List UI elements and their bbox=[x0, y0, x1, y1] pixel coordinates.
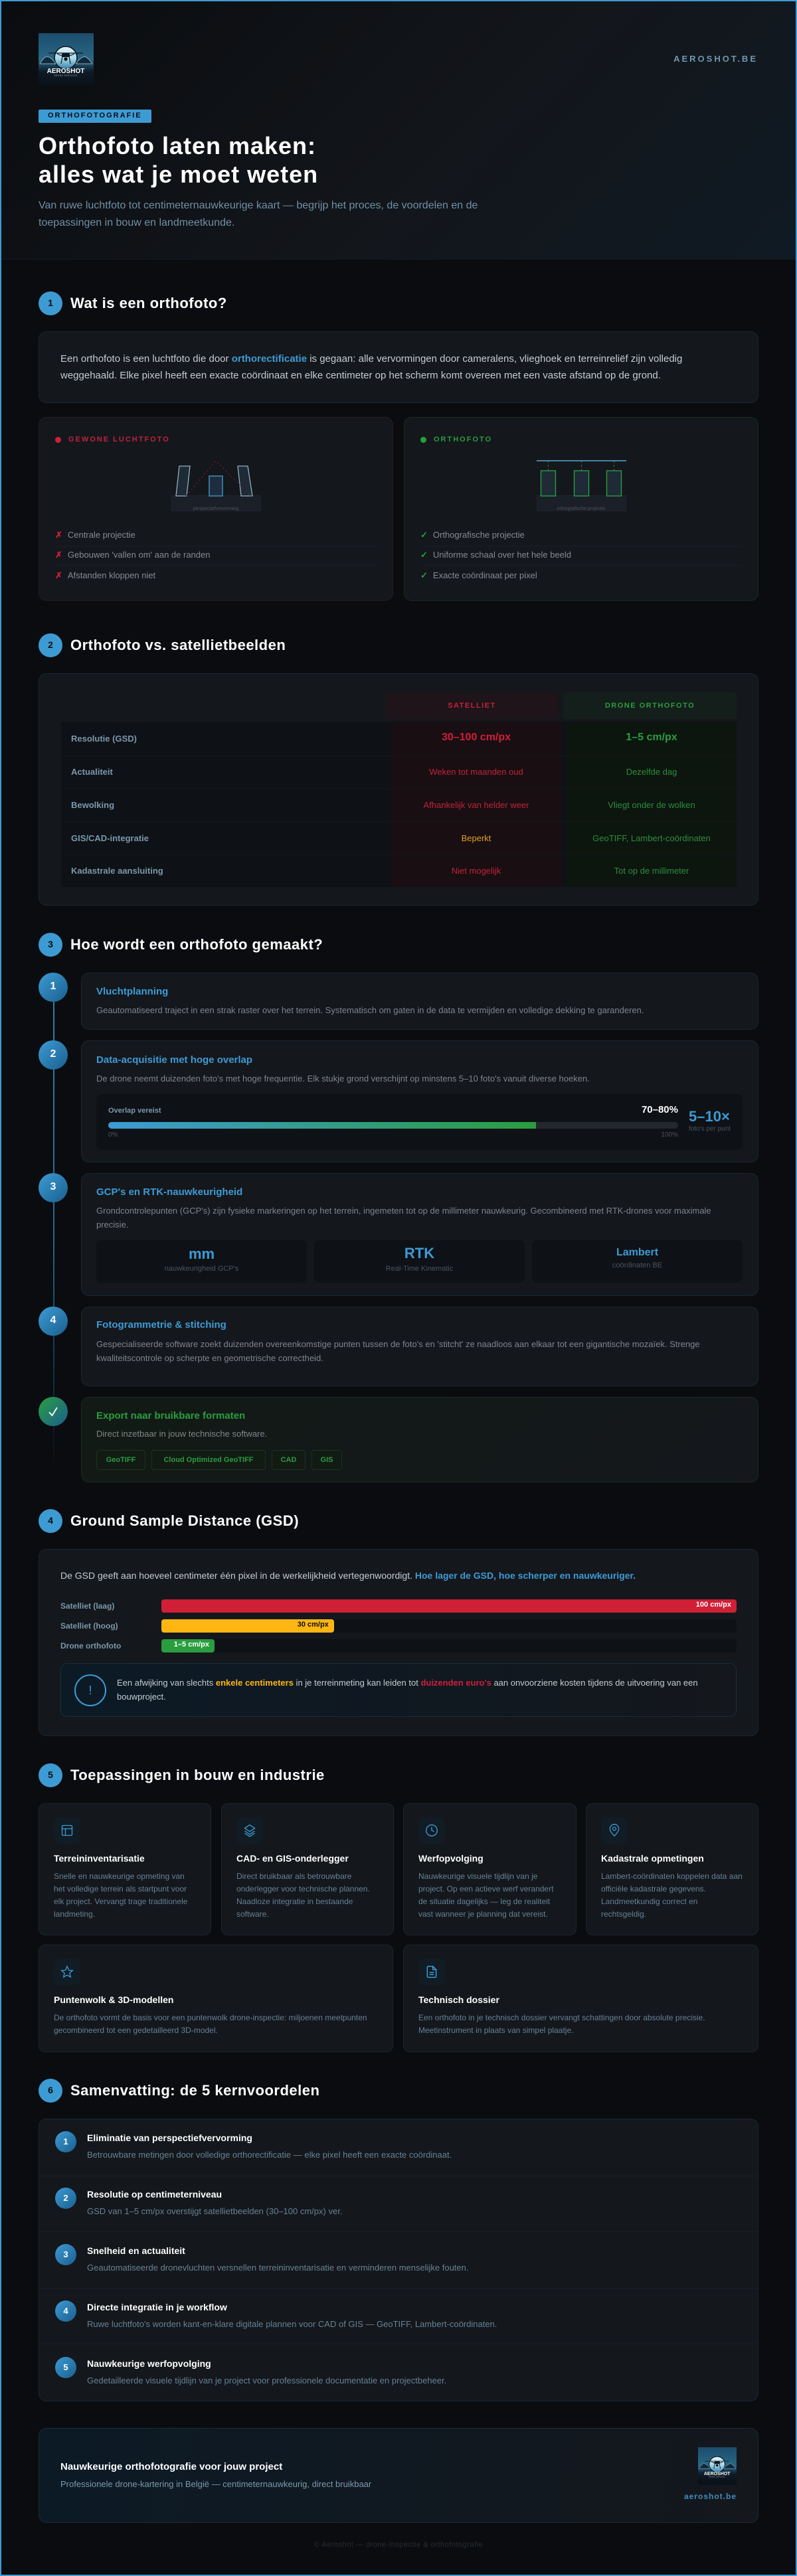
label: ORTHOFOTO bbox=[434, 436, 492, 443]
row: kadaster bbox=[61, 855, 737, 887]
callout text: Een afwijking van slechts enkele centimeters in je terreinmeting kan leiden tot duizenden euro's aan onvoorziene kosten tijdens de uitvoering van een bbox=[117, 1678, 698, 1688]
badge: ORTHOFOTOGRAFIE bbox=[48, 112, 142, 120]
icon: exclamation bbox=[74, 1674, 106, 1706]
step circle 5: check bbox=[39, 1397, 68, 1426]
cta subtitle: Professionele drone-kartering in België — centimeternauwkeurig, direct bruikbaar bbox=[60, 2479, 371, 2489]
item text: GSD van 1–5 cm/px overstijgt satellietbeelden (30–100 cm/px) ver. bbox=[87, 2206, 342, 2216]
chip: Cloud Optimized GeoTIFF bbox=[163, 1456, 254, 1464]
row: resolutie: Resolutie (GSD) bbox=[71, 734, 137, 744]
number bbox=[55, 2188, 76, 2209]
section heading 1: 1 bbox=[48, 297, 53, 308]
section heading 2 bbox=[39, 633, 286, 657]
step circle 1 bbox=[39, 973, 68, 1002]
step title: Fotogrammetrie & stitching bbox=[96, 1319, 226, 1330]
chip bbox=[311, 1450, 342, 1470]
icon: layout bbox=[54, 1817, 80, 1844]
application card: cad bbox=[221, 1803, 394, 1935]
icon: document bbox=[418, 1959, 445, 1985]
callout text: bouwproject. bbox=[117, 1692, 166, 1702]
section heading 5: 5 bbox=[48, 1769, 53, 1780]
text bbox=[54, 2013, 367, 2035]
text bbox=[418, 1872, 554, 1919]
definition text bbox=[60, 353, 682, 381]
number: 4 bbox=[63, 2306, 68, 2316]
item text: Ruwe luchtfoto's worden kant-en-klare digitale plannen voor CAD of GIS — GeoTIFF, Lambert-coördinaten. bbox=[87, 2319, 497, 2329]
section heading 4 bbox=[39, 1509, 299, 1533]
section heading 3: 3 bbox=[48, 939, 53, 949]
tile: rtk: Real-Time Kinematic bbox=[386, 1265, 453, 1273]
item title: Eliminatie van perspectiefvervorming bbox=[87, 2133, 252, 2143]
text bbox=[601, 1872, 743, 1919]
text: landmeting. bbox=[54, 1909, 95, 1919]
icon: pin bbox=[601, 1817, 628, 1844]
step circle 3 bbox=[39, 1173, 68, 1202]
text: Nauwkeurige visuele tijdlijn van je bbox=[418, 1872, 537, 1881]
tile: mm bbox=[96, 1240, 307, 1283]
item title: Snelheid en actualiteit bbox=[87, 2245, 185, 2256]
chip bbox=[272, 1450, 306, 1470]
title: Puntenwolk & 3D-modellen bbox=[54, 1994, 173, 2005]
text: vast wanneer je planning dat vereist. bbox=[418, 1909, 548, 1919]
row: bewolking: Afhankelijk van helder weer bbox=[424, 800, 529, 810]
row: resolutie: 30–100 cm/px bbox=[442, 732, 511, 743]
panel: GSD bbox=[39, 1549, 758, 1736]
step text: precisie. bbox=[96, 1220, 128, 1230]
application card: puntenwolk bbox=[39, 1945, 393, 2052]
section heading 2: Orthofoto vs. satellietbeelden bbox=[70, 637, 286, 653]
title: Terreininventarisatie bbox=[54, 1853, 145, 1864]
text bbox=[236, 1872, 370, 1919]
row: bewolking bbox=[61, 789, 737, 821]
row: actualiteit: Dezelfde dag bbox=[626, 767, 677, 777]
footer: © Aeroshot — drone-inspectie & orthofotografie bbox=[314, 2541, 483, 2549]
tile value: RTK bbox=[404, 1245, 434, 1261]
chip bbox=[96, 1450, 145, 1470]
list: drawbacks bbox=[55, 530, 377, 580]
subtitle: Van ruwe luchtfoto tot centimeternauwkeurige kaart — begrijp het proces, de voordelen en de bbox=[39, 200, 478, 211]
row: resolutie: 1–5 cm/px bbox=[626, 732, 677, 743]
application card: dossier bbox=[403, 1945, 758, 2052]
step card 1 bbox=[81, 973, 758, 1030]
row: gis/cad: Beperkt bbox=[462, 833, 491, 843]
step text: Gespecialiseerde software zoekt duizenden overeenkomstige punten tussen de foto's en 'stitcht' ze naadloos aan elkaar tot een gigantische mozaïek. Strenge bbox=[96, 1339, 700, 1349]
cta title: Nauwkeurige orthofotografie voor jouw project bbox=[60, 2461, 282, 2472]
column header: drone orthofoto bbox=[563, 692, 737, 719]
icon: star bbox=[54, 1959, 80, 1985]
text: Een orthofoto in je technisch dossier vervangt schattingen door absolute precisie. bbox=[418, 2013, 705, 2022]
bar: satelliet hoog bbox=[161, 1619, 737, 1633]
diagram: orthographic projection: orthografische projectie bbox=[557, 507, 605, 511]
tile: mm: nauwkeurigheid GCP's bbox=[165, 1265, 238, 1273]
number: 5 bbox=[63, 2362, 68, 2372]
overlap gauge bbox=[96, 1094, 743, 1150]
tile: lambert: coördinaten BE bbox=[612, 1261, 662, 1269]
logo bbox=[39, 33, 94, 83]
row: bewolking: Vliegt onder de wolken bbox=[608, 800, 695, 810]
section heading 1 bbox=[39, 291, 227, 315]
diagram: orthographic projection bbox=[537, 460, 626, 511]
section heading 4: Ground Sample Distance (GSD) bbox=[70, 1512, 299, 1529]
cta logo bbox=[698, 2447, 737, 2484]
icon: layers bbox=[236, 1817, 263, 1844]
subtitle bbox=[39, 200, 478, 228]
bar label: Satelliet (hoog) bbox=[60, 1621, 118, 1631]
label: GEWONE LUCHTFOTO bbox=[68, 436, 170, 443]
item 3: ✗ Afstanden kloppen niet bbox=[55, 570, 155, 580]
text: het volledige terrein als startpunt voor bbox=[54, 1884, 187, 1893]
tile: rtk bbox=[314, 1240, 525, 1283]
row: actualiteit: Weken tot maanden oud bbox=[429, 767, 523, 777]
cta link: aeroshot.be bbox=[684, 2492, 737, 2501]
panel: gewone luchtfoto bbox=[39, 417, 393, 601]
text: gecombineerd tot een gedetailleerd 3D-model. bbox=[54, 2026, 218, 2035]
logo: DRONE SERVICES bbox=[54, 74, 78, 77]
step text: kwaliteitscontrole op scherpte en geometrische correctheid. bbox=[96, 1353, 323, 1363]
section heading 6 bbox=[39, 2079, 319, 2103]
column header: satelliet bbox=[385, 692, 559, 719]
callout text bbox=[117, 1678, 698, 1702]
text: Meetinstrument in plaats van simpel plaatje. bbox=[418, 2026, 573, 2035]
logo: AEROSHOT bbox=[47, 68, 84, 75]
bar: satelliet hoog: 30 cm/px bbox=[298, 1621, 329, 1629]
photo count: 5–10× bbox=[689, 1108, 730, 1125]
step text: Geautomatiseerd traject in een strak raster over het terrein. Systematisch om gaten in de data te vermijden en volledige dekking te garanderen. bbox=[96, 1005, 644, 1015]
text: Naadloze integratie in bestaande bbox=[236, 1897, 353, 1906]
title bbox=[39, 132, 318, 188]
item 2: ✗ Gebouwen 'vallen om' aan de randen bbox=[55, 550, 210, 560]
gauge label: Overlap vereist bbox=[108, 1107, 161, 1115]
bar: drone bbox=[161, 1639, 737, 1652]
row: actualiteit: Actualiteit bbox=[71, 767, 113, 777]
row: resolutie bbox=[61, 722, 737, 756]
callout bbox=[60, 1663, 737, 1717]
section heading 6: Samenvatting: de 5 kernvoordelen bbox=[70, 2082, 319, 2099]
gauge track bbox=[108, 1122, 678, 1129]
icon: clock bbox=[418, 1817, 445, 1844]
item title: Resolutie op centimeterniveau bbox=[87, 2189, 222, 2200]
text: Direct bruikbaar als betrouwbare bbox=[236, 1872, 351, 1881]
title: Orthofoto laten maken: bbox=[39, 132, 316, 159]
bar: satelliet laag: 100 cm/px bbox=[696, 1601, 731, 1609]
step text: Direct inzetbaar in jouw technische software. bbox=[96, 1429, 267, 1439]
bar label: Drone orthofoto bbox=[60, 1641, 121, 1650]
step text: Grondcontrolepunten (GCP's) zijn fysieke markeringen op het terrein, ingemeten tot op de millimeter nauwkeurig. Gecombineerd met RTK-drones voor maximale bbox=[96, 1206, 711, 1216]
section heading 5: Toepassingen in bouw en industrie bbox=[70, 1767, 325, 1783]
step title: Data-acquisitie met hoge overlap bbox=[96, 1054, 252, 1066]
text: rechtsgeldig. bbox=[601, 1909, 646, 1919]
number bbox=[55, 2357, 76, 2378]
chip: CAD bbox=[281, 1456, 296, 1464]
section heading 4: 4 bbox=[48, 1515, 53, 1526]
step circle 4 bbox=[39, 1307, 68, 1336]
subtitle: toepassingen in bouw en landmeetkunde. bbox=[39, 217, 234, 228]
tile value: Lambert bbox=[616, 1247, 658, 1258]
section heading 3: Hoe wordt een orthofoto gemaakt? bbox=[70, 936, 323, 953]
row: actualiteit bbox=[61, 756, 737, 788]
text: software. bbox=[236, 1909, 269, 1919]
gauge value: 70–80% bbox=[642, 1104, 678, 1115]
panel: orthofoto bbox=[404, 417, 758, 601]
application card: kadaster bbox=[586, 1803, 758, 1935]
item 1: ✓ Orthografische projectie bbox=[420, 530, 525, 540]
row: kadaster: Tot op de millimeter bbox=[614, 866, 689, 876]
row: gis/cad: GeoTIFF, Lambert-coördinaten bbox=[592, 833, 711, 843]
item 1: ✗ Centrale projectie bbox=[55, 530, 135, 540]
step circle 4: 4 bbox=[50, 1315, 56, 1326]
text: elk project. Vervangt trage traditionele bbox=[54, 1897, 187, 1906]
column header: drone orthofoto: DRONE ORTHOFOTO bbox=[605, 702, 695, 710]
step card 5 bbox=[81, 1397, 758, 1483]
header band bbox=[0, 0, 797, 260]
row: kadaster: Niet mogelijk bbox=[452, 866, 501, 876]
bar: drone: 1–5 cm/px bbox=[174, 1641, 209, 1649]
step text: De drone neemt duizenden foto's met hoge frequentie. Elk stukje grond verschijnt op minstens 5–10 foto's vanuit diverse hoeken. bbox=[96, 1074, 590, 1084]
item 2: ✓ Uniforme schaal over het hele beeld bbox=[420, 550, 571, 560]
text: onderlegger voor technische plannen. bbox=[236, 1884, 370, 1893]
step circle 2 bbox=[39, 1040, 68, 1070]
step text bbox=[96, 1339, 700, 1363]
number: 3 bbox=[63, 2249, 68, 2259]
step title: Export naar bruikbare formaten bbox=[96, 1410, 245, 1421]
step title: Vluchtplanning bbox=[96, 986, 168, 997]
dot bbox=[420, 437, 426, 443]
panel: summary bbox=[39, 2119, 758, 2401]
step card 3 bbox=[81, 1173, 758, 1296]
column header: satelliet: SATELLIET bbox=[448, 702, 496, 710]
text bbox=[418, 2013, 705, 2035]
row: kadaster: Kadastrale aansluiting bbox=[71, 866, 163, 876]
bar label: Satelliet (laag) bbox=[60, 1601, 114, 1611]
definition text: weggehaald. Elke pixel heeft een exacte coördinaat en elke centimeter op het scherm komt overeen met een vaste afstand op de grond. bbox=[60, 370, 661, 381]
dot bbox=[55, 437, 61, 443]
step circle 2: 2 bbox=[50, 1048, 56, 1060]
number: 1 bbox=[63, 2136, 68, 2146]
number bbox=[55, 2244, 76, 2265]
tile: lambert bbox=[532, 1240, 743, 1283]
text bbox=[54, 1872, 187, 1919]
chip: GIS bbox=[321, 1456, 333, 1464]
photo count label: foto's per punt bbox=[689, 1125, 731, 1133]
step circle 3: 3 bbox=[50, 1181, 56, 1192]
item title: Nauwkeurige werfopvolging bbox=[87, 2358, 211, 2369]
step card 2 bbox=[81, 1040, 758, 1163]
section heading 6: 6 bbox=[48, 2085, 53, 2095]
title: Kadastrale opmetingen bbox=[601, 1853, 704, 1864]
section heading 1: Wat is een orthofoto? bbox=[70, 295, 227, 311]
cta logo: DRONE SERVICES bbox=[709, 2476, 725, 2478]
number: 2 bbox=[63, 2193, 68, 2203]
text: Landmeetkundig correct en bbox=[601, 1897, 697, 1906]
title: CAD- en GIS-onderlegger bbox=[236, 1853, 349, 1864]
panel: comparison table bbox=[39, 673, 758, 906]
badge bbox=[39, 110, 151, 123]
step title: GCP's en RTK-nauwkeurigheid bbox=[96, 1186, 242, 1198]
item text: Gedetailleerde visuele tijdlijn van je project voor professionele documentatie en projectbeheer. bbox=[87, 2375, 446, 2385]
application card: werf bbox=[403, 1803, 576, 1935]
section heading 2: 2 bbox=[48, 639, 53, 650]
title: alles wat je moet weten bbox=[39, 161, 318, 188]
chip: GeoTIFF bbox=[106, 1456, 135, 1464]
section heading 3 bbox=[39, 933, 323, 957]
section heading 5 bbox=[39, 1763, 325, 1787]
step text bbox=[96, 1206, 711, 1230]
call to action bbox=[39, 2428, 758, 2523]
application card: terrein bbox=[39, 1803, 211, 1935]
list: benefits bbox=[420, 530, 742, 580]
row: gis/cad bbox=[61, 822, 737, 854]
number bbox=[55, 2131, 76, 2152]
step card 4 bbox=[81, 1307, 758, 1386]
diagram: perspective distortion: perspectiefvervorming bbox=[193, 507, 239, 511]
text: De orthofoto vormt de basis voor een puntenwolk drone-inspectie: miljoenen meetpunten bbox=[54, 2013, 367, 2022]
site name: AEROSHOT.BE bbox=[673, 54, 758, 64]
gauge min: 0% bbox=[108, 1131, 118, 1139]
item text: Betrouwbare metingen door volledige orthorectificatie — elke pixel heeft een exacte coördinaat. bbox=[87, 2150, 452, 2160]
definition text: Een orthofoto is een luchtfoto die door orthorectificatie is gegaan: alle vervormingen door cameralens, vlieghoek en terreinreliëf zijn volledig bbox=[60, 353, 682, 364]
text: project. Op een actieve werf verandert bbox=[418, 1884, 553, 1893]
gauge max: 100% bbox=[661, 1131, 678, 1139]
chip bbox=[151, 1450, 266, 1470]
bar: satelliet laag bbox=[161, 1599, 737, 1613]
item text: Geautomatiseerde dronevluchten versnellen terreininventarisatie en verminderen menselijke fouten. bbox=[87, 2263, 469, 2273]
text: officiële kadastrale gegevens. bbox=[601, 1884, 706, 1893]
cta logo: AEROSHOT bbox=[704, 2472, 731, 2476]
title: Werfopvolging bbox=[418, 1853, 484, 1864]
item 3: ✓ Exacte coördinaat per pixel bbox=[420, 570, 537, 580]
row: bewolking: Bewolking bbox=[71, 800, 114, 810]
diagram: perspective distortion bbox=[171, 461, 261, 511]
text: Snelle en nauwkeurige opmeting van bbox=[54, 1872, 185, 1881]
item title: Directe integratie in je workflow bbox=[87, 2302, 227, 2312]
row: gis/cad: GIS/CAD-integratie bbox=[71, 833, 149, 843]
tile value: mm bbox=[189, 1246, 215, 1262]
GSD intro: De GSD geeft aan hoeveel centimeter één pixel in de werkelijkheid vertegenwoordigt. Hoe lager de GSD, hoe scherper en nauwkeuriger. bbox=[60, 1570, 636, 1581]
number bbox=[55, 2300, 76, 2322]
text: de situatie dagelijks — leg de realiteit bbox=[418, 1897, 550, 1906]
icon: exclamation: ! bbox=[88, 1684, 92, 1697]
text: Lambert-coördinaten koppelen data aan bbox=[601, 1872, 743, 1881]
panel: definition bbox=[39, 331, 758, 403]
title: Technisch dossier bbox=[418, 1994, 499, 2005]
step circle 1: 1 bbox=[50, 981, 56, 992]
